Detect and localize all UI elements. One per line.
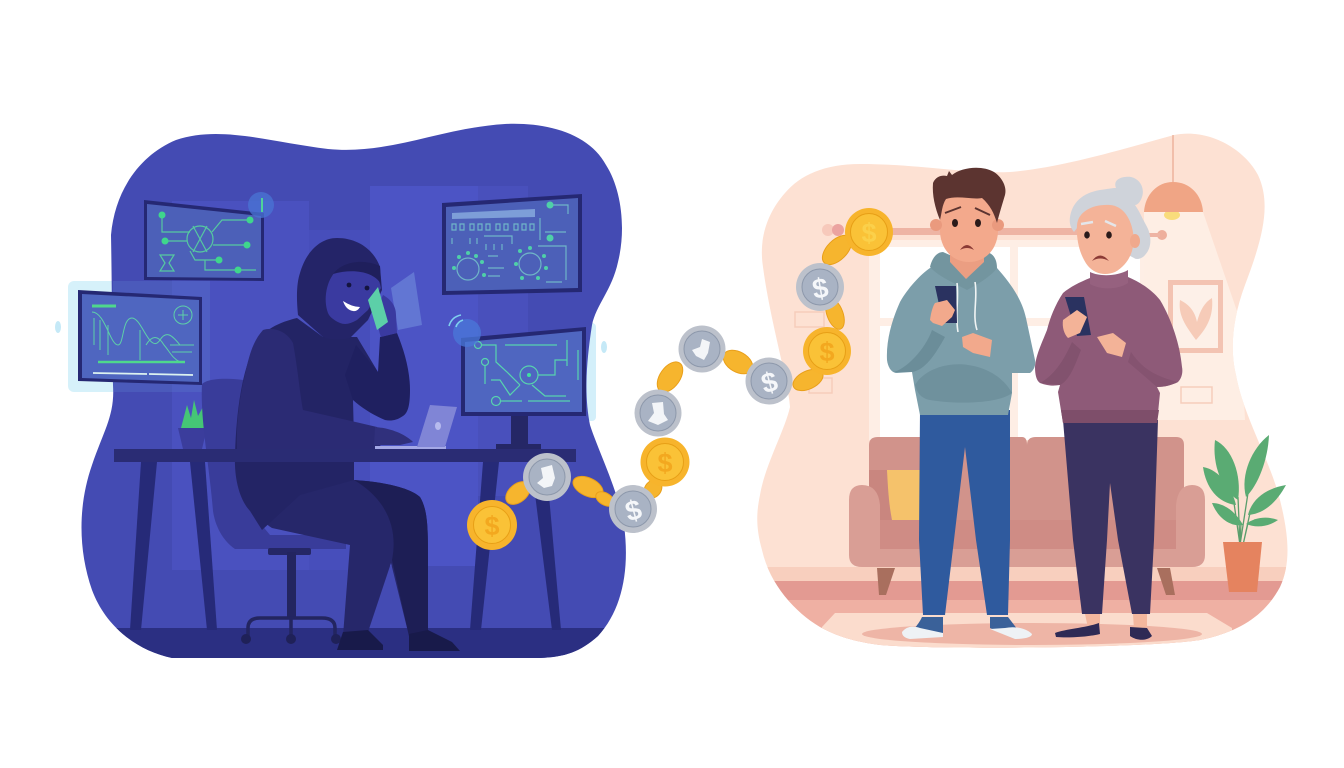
shoes [337, 630, 383, 650]
hand on keyboard [374, 427, 413, 445]
gold coin 4 [640, 438, 690, 486]
money chain [467, 208, 893, 550]
phone [935, 286, 957, 323]
hand [378, 295, 397, 337]
floor band [116, 628, 604, 658]
silver coin 9: $ [810, 272, 831, 305]
monitor: left glowing [78, 290, 202, 385]
gold coin 10 [845, 208, 893, 256]
hand holding phone [1063, 310, 1087, 338]
eyes [347, 283, 351, 287]
silver coin 5 [634, 390, 682, 436]
pants [1063, 420, 1158, 614]
silver coin 3: $ [622, 493, 645, 527]
hair fringe [333, 262, 381, 284]
hair [933, 168, 1006, 223]
silver coin 6 [678, 326, 726, 372]
potted plant [1203, 435, 1286, 592]
hand on chest [1097, 333, 1126, 357]
hanging lamp [1144, 135, 1203, 220]
floor [768, 567, 1286, 648]
illustration canvas [55, 124, 1288, 658]
eyes and brows [952, 219, 958, 227]
window [869, 240, 1144, 440]
office chair [202, 379, 346, 644]
shoes [912, 617, 943, 635]
legs [255, 479, 428, 636]
sofa [849, 437, 1205, 595]
wall outlets [795, 312, 1212, 403]
gold coin 1: $ [484, 511, 500, 541]
halo tint inside blob [113, 281, 210, 392]
neck [950, 252, 984, 279]
pants [919, 410, 1010, 615]
face [326, 268, 381, 324]
silver coin 7 [746, 358, 792, 404]
silver coin 9 [796, 263, 844, 311]
smile [343, 301, 360, 311]
glow badge: top [248, 192, 274, 218]
wall picture [1168, 280, 1223, 353]
phone [1065, 297, 1091, 336]
drawstrings [957, 282, 977, 332]
ankles [1085, 614, 1100, 628]
blob background [757, 134, 1288, 648]
left sleeve shading [893, 330, 945, 372]
monitor: bottom right with stand [461, 327, 586, 450]
hood [297, 238, 382, 339]
silver coin 2 [523, 453, 571, 501]
hand holding phone [930, 300, 955, 326]
gold coin 8: $ [819, 337, 835, 367]
wall panels [172, 186, 528, 570]
panel: scammer scene [55, 124, 630, 660]
silver coin 3 [609, 485, 657, 533]
hoodie body [887, 262, 1035, 415]
panel: victims scene [750, 134, 1300, 660]
silver coin 7: $ [758, 365, 781, 399]
glow badge: monitor corner [449, 315, 481, 347]
sweater [1035, 277, 1182, 423]
head [940, 195, 998, 262]
hood [930, 252, 997, 290]
hooded scammer [235, 238, 460, 651]
collar [1090, 270, 1128, 288]
monitor: top left [144, 200, 264, 281]
hand on chest [962, 333, 992, 357]
room interior [90, 186, 630, 660]
shoes [1055, 623, 1100, 637]
face [1077, 205, 1134, 274]
hoodie pouch pocket [915, 364, 1012, 403]
mouth [1092, 256, 1109, 261]
older woman [1035, 177, 1182, 640]
mouth [960, 245, 974, 250]
sleeve shading [1040, 342, 1081, 385]
gold coin 8 [803, 327, 851, 375]
raised arm [345, 333, 410, 421]
gold coin 1 [467, 500, 517, 550]
monitor glow halos outside blob [55, 281, 607, 421]
gold coin 4: $ [657, 448, 673, 478]
gold coin 10: $ [861, 218, 877, 248]
laptop [375, 405, 457, 450]
monitor: top right [442, 194, 582, 295]
potted plant [178, 400, 207, 449]
phone [368, 287, 388, 330]
blob background [82, 124, 626, 658]
young man [887, 168, 1035, 639]
chain links [501, 230, 857, 509]
torso behind arm [235, 318, 378, 530]
pillow [887, 470, 922, 520]
hair [1070, 177, 1150, 259]
ear [1130, 234, 1140, 248]
eyes and brows [1084, 231, 1090, 239]
sweater hem [1061, 410, 1159, 423]
lamp light [1144, 212, 1245, 420]
desk [114, 449, 576, 630]
curtain rod [822, 224, 1167, 240]
holographic panel near phone [391, 272, 422, 330]
near arm [237, 329, 381, 449]
